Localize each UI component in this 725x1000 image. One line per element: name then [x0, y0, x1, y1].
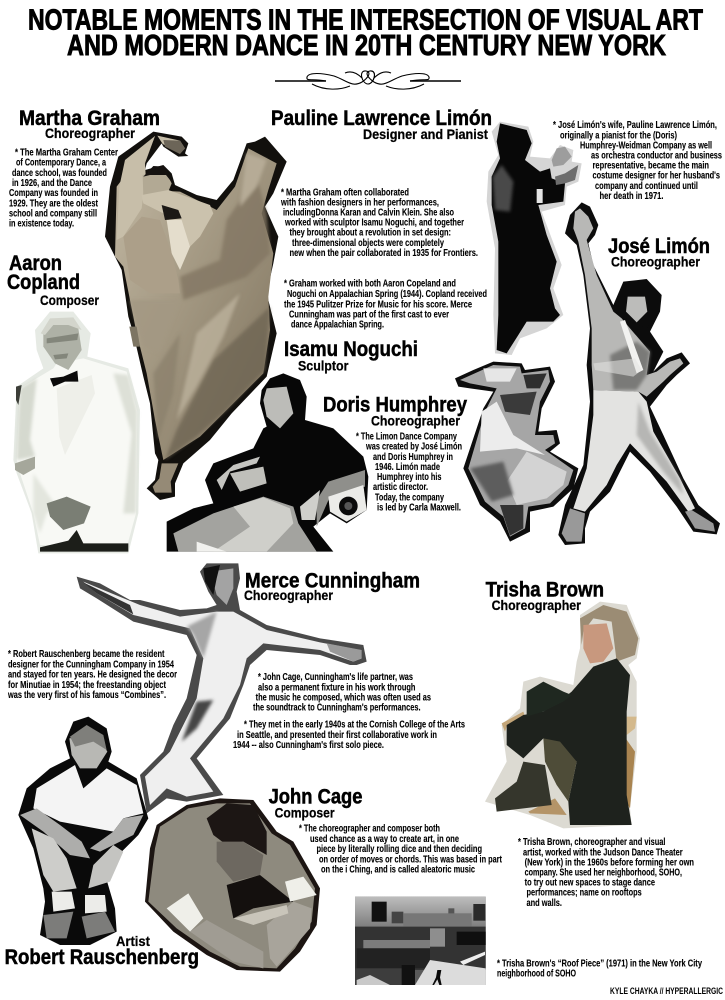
text: Martha Graham school: Company was founded in [9, 188, 98, 199]
chest strap [620, 320, 643, 373]
text: Martha Graham school [9, 148, 118, 230]
text: chance and aleatoric music: on the i Ching, and is called aleatoric music [321, 864, 475, 875]
text: Limón Dance Company: * The Limon Dance Company [356, 432, 457, 443]
heading: Doris Humphrey: Choreographer [371, 414, 461, 429]
photo: Merce Cunningham [77, 563, 367, 813]
text: Limón Dance Company: is led by Carla Maxwell. [377, 503, 461, 514]
text: Martha Graham school: dance school, was founded [12, 168, 107, 179]
text: John Cage life partner [253, 672, 431, 714]
heading: José Limón: José Limón [608, 235, 710, 258]
heading: Merce Cunningham: Merce Cunningham [245, 570, 420, 592]
text: Rauschenberg designer [7, 649, 177, 701]
heading: Martha Graham: Choreographer [45, 126, 136, 141]
text: Graham collaborations: * Martha Graham often collaborated [281, 188, 409, 198]
text: Martha Graham school: school and company still [9, 208, 97, 220]
text: John Cage life partner: the music he composed, which was often used as [256, 692, 431, 703]
photo: José Limón [558, 202, 720, 545]
text: Cornish College: in Seattle, and presented their first collaborative work in [237, 730, 437, 741]
heading: José Limón: Choreographer [611, 255, 701, 270]
text: Martha Graham school: in 1926, and the Dance [12, 178, 92, 189]
text: chance and aleatoric music: piece by literally rolling dice and then deciding [316, 844, 482, 855]
text: Graham collaborations [280, 188, 478, 259]
text: Appalachian Spring: Cunningham was part of the first cast to ever [289, 309, 449, 320]
heading: Trisha Brown: Trisha Brown [486, 579, 604, 602]
chair cushion [230, 467, 267, 492]
text: Limón Dance Company: 1946. Limón made [375, 462, 440, 473]
heading: Robert Rauschenberg: Artist [116, 934, 150, 949]
text: Cornish College: 1944 -- also Cunningham's first solo piece. [233, 740, 384, 751]
heading: Trisha Brown [486, 579, 604, 613]
text: John Cage life partner: also a permanent fixture in his work through [258, 682, 416, 693]
heading: Pauline Lawrence Limón: Designer and Pianist [363, 127, 488, 142]
text: Limón Dance Company: Today, the company [375, 493, 444, 504]
text: Graham collaborations: with fashion designers in her performances, [280, 198, 439, 208]
text: Martha Graham school: 1929. They are the oldest [9, 198, 98, 210]
photo: John Cage [145, 798, 320, 972]
text: Trisha Brown biography: performances; name on rooftops [526, 888, 642, 899]
heading: Isamu Noguchi: Sculptor [298, 359, 349, 374]
heading: Aaron Copland: Copland [7, 271, 80, 294]
hands [552, 147, 572, 167]
text: Appalachian Spring [284, 279, 487, 331]
heading: Doris Humphrey [323, 394, 467, 429]
text: chance and aleatoric music: used chance as a way to create art, in one [310, 834, 459, 845]
ornamental divider [275, 71, 461, 89]
heading: Martha Graham [19, 107, 160, 141]
text: Martha Graham school: of Contemporary Dance, a [16, 158, 106, 168]
heading: José Limón [608, 235, 710, 270]
heading: Robert Rauschenberg: Robert Rauschenberg [5, 946, 199, 969]
text: chance and aleatoric music: * The choreographer and composer both [299, 824, 440, 835]
heading: Aaron Copland: Aaron [9, 252, 62, 275]
heading: Trisha Brown: Choreographer [492, 598, 582, 613]
text: Martha Graham school: * The Martha Graham Center [15, 148, 118, 158]
raised arm [117, 136, 185, 240]
heading: Merce Cunningham [244, 570, 420, 603]
photo: Aaron Copland [13, 312, 140, 553]
text: Appalachian Spring: the 1945 Pulitzer Prize for Music for his score. Merce [284, 299, 472, 310]
photo: Trisha Brown [485, 602, 640, 828]
photo: Doris Humphrey [455, 362, 578, 542]
text: Rauschenberg designer: was the very first of his famous “Combines”. [7, 690, 166, 701]
text: John Cage life partner: * John Cage, Cunningham's life partner, was [258, 672, 413, 683]
text: Graham collaborations: new when the pair collaborated in 1935 for Frontiers. [290, 248, 478, 259]
heading: Pauline Lawrence Limón: Pauline Lawrence Limón [271, 107, 492, 130]
forearm and hand [317, 470, 365, 527]
text: Trisha Brown biography: to try out new spaces to stage dance [525, 878, 655, 889]
title [28, 4, 703, 62]
heading: Isamu Noguchi: Isamu Noguchi [284, 338, 418, 361]
heading: Robert Rauschenberg [5, 934, 199, 969]
text: Rauschenberg designer: * Robert Rauschenberg became the resident [8, 649, 165, 660]
text: Graham collaborations: three-dimensional objects were completely [292, 238, 444, 249]
text: Limón Dance Company: was created by José Limón [365, 442, 462, 453]
text: Graham collaborations: worked with sculptor Isamu Noguchi, and together [284, 218, 464, 228]
text: Appalachian Spring: dance Appalachian Spring. [291, 320, 384, 331]
heading: Doris Humphrey: Doris Humphrey [323, 394, 467, 417]
heading: John Cage [269, 785, 362, 820]
text: Pauline Lawrence Limón biography: her death in 1971. [600, 191, 664, 202]
text: Cornish College: * They met in the early 1940s at the Cornish College of the Arts [244, 720, 465, 731]
foot [153, 463, 178, 493]
icon: bow tie [50, 371, 78, 387]
text: Pauline Lawrence Limón biography [553, 120, 722, 202]
heading: Merce Cunningham: Choreographer [244, 588, 334, 603]
chair arm [328, 485, 367, 522]
dress shading [130, 153, 270, 460]
text: Rauschenberg designer: for Minutiae in 1954; the freestanding object [8, 680, 167, 691]
text: Rauschenberg designer: designer for the Cunningham Company in 1954 [8, 660, 174, 670]
heading: Martha Graham: Martha Graham [19, 107, 160, 130]
heading: Aaron Copland: Composer [40, 293, 100, 308]
text: Graham collaborations: they brought about a revolution in set design: [290, 228, 451, 239]
heading: Pauline Lawrence Limón [271, 107, 492, 142]
text: Martha Graham school: in existence today. [9, 218, 74, 230]
head [143, 170, 172, 210]
text: Appalachian Spring: * Graham worked with both Aaron Copeland and [284, 279, 456, 290]
text: chance and aleatoric music [299, 824, 502, 875]
text: Trisha Brown biography [518, 837, 694, 909]
text: John Cage life partner: the soundtrack to Cunningham's performances. [253, 703, 421, 714]
heading: John Cage: John Cage [269, 785, 362, 808]
text: Limón Dance Company: artistic director. [373, 482, 428, 493]
heading: John Cage: Composer [275, 805, 335, 820]
heading: Aaron Copland [7, 252, 100, 308]
sleeve and cuff [142, 190, 213, 250]
caption: Roof Piece: neighborhood of SOHO [497, 968, 576, 979]
head [623, 281, 660, 328]
text: Trisha Brown biography: and walls. [526, 898, 562, 909]
photo: Pauline Lawrence Limón [487, 122, 582, 355]
text: Trisha Brown biography: * Trisha Brown, choreographer and visual [518, 837, 666, 848]
text: Limón Dance Company [356, 432, 462, 514]
trousers [573, 390, 695, 512]
text: Cornish College [233, 720, 465, 751]
text: Graham collaborations: includingDonna Karan and Calvin Klein. She also [283, 208, 454, 218]
text: Limón Dance Company: Humphrey into his [377, 472, 442, 483]
text: Pauline Lawrence Limón biography: originally a pianist for the (Doris) [560, 130, 677, 141]
photo: Roof Piece [355, 897, 486, 985]
text: chance and aleatoric music: on order of moves or chords. This was based in part [319, 854, 502, 865]
heading: Isamu Noguchi [284, 338, 418, 374]
photo: Robert Rauschenberg [18, 717, 148, 945]
text: Rauschenberg designer: and stayed for ten years. He designed the decor [8, 670, 177, 681]
text: Appalachian Spring: Noguchi on Appalachian Spring (1944). Copland received [287, 289, 487, 300]
caption: Roof Piece [497, 958, 702, 979]
photo: Martha Graham [105, 132, 287, 500]
photo: Isamu Noguchi [167, 373, 368, 552]
text: Limón Dance Company: and Doris Humphrey in [373, 452, 453, 463]
